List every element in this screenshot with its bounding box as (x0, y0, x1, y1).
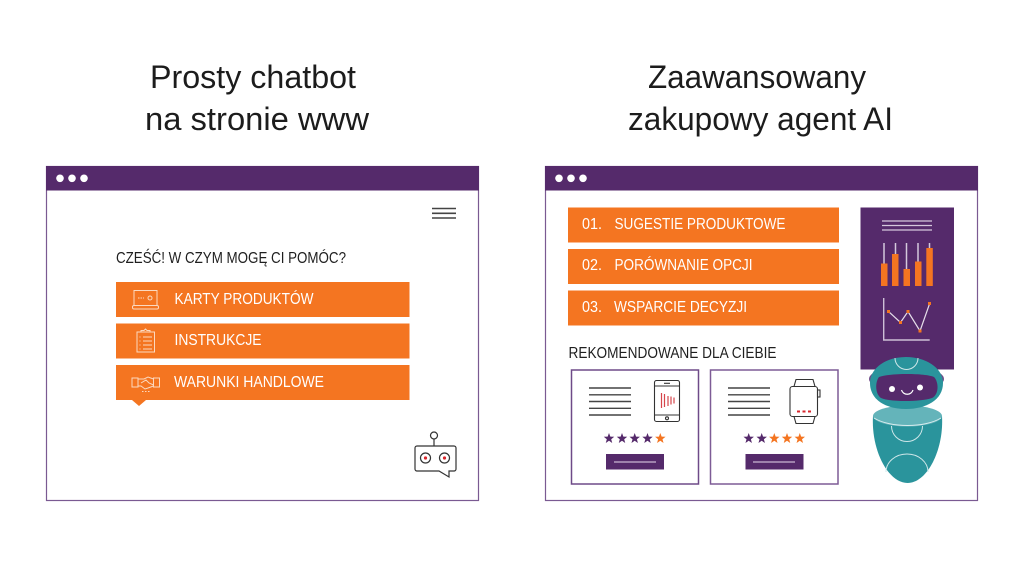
robot neck plate (873, 406, 942, 426)
window title bar (545, 166, 978, 190)
greeting text: CZEŚĆ! W CZYM MOGĘ CI POMÓC? (116, 249, 346, 267)
candlestick chart (881, 243, 933, 286)
product card: smartwatch (710, 370, 838, 484)
option 03: decision support: 03. (582, 299, 602, 316)
title: advanced AI agent (628, 59, 893, 137)
menu button: trade terms (116, 365, 410, 406)
title: simple chatbot: na stronie www (145, 101, 370, 137)
panel: simple chatbot browser window (46, 166, 479, 500)
text lines (589, 388, 631, 415)
title: simple chatbot: Prosty chatbot (150, 59, 356, 95)
menu button: instructions (116, 324, 410, 358)
menu button: product cards: KARTY PRODUKTÓW (174, 291, 314, 308)
icon: chatbot speech bubble (415, 432, 456, 477)
robot body (873, 416, 942, 483)
panel: analytics sidebar (860, 208, 954, 370)
product card: phone (572, 370, 698, 484)
robot visor and face (876, 374, 938, 401)
illustration: teal robot (869, 357, 944, 483)
option 01: product suggestions (568, 208, 839, 242)
option 03: decision support: WSPARCIE DECYZJI (614, 299, 747, 316)
text lines (728, 388, 770, 415)
body details (886, 426, 928, 472)
option 01: product suggestions: SUGESTIE PRODUKTOWE (614, 216, 786, 233)
window title bar (46, 166, 479, 190)
star rating: 2 purple 3 orange (743, 433, 805, 443)
icon: hamburger menu (432, 208, 456, 218)
robot ears (869, 366, 944, 392)
text lines (882, 221, 932, 230)
option 01: product suggestions: 01. (582, 216, 602, 233)
icon: laptop (132, 290, 158, 309)
option 02: comparing options (568, 249, 839, 284)
panel: AI agent browser window (545, 166, 978, 500)
menu button: instructions: INSTRUKCJE (174, 332, 262, 349)
icon: handshake (132, 377, 160, 392)
title: advanced AI agent: Zaawansowany (648, 59, 866, 95)
title: simple chatbot (145, 59, 370, 137)
option 02: comparing options: PORÓWNANIE OPCJI (614, 257, 752, 274)
option 02: comparing options: 02. (582, 257, 602, 274)
robot head (870, 357, 943, 409)
icon: smartwatch (790, 380, 820, 424)
button (606, 454, 664, 470)
icon: smartphone (654, 380, 680, 422)
line chart (884, 298, 931, 340)
heading: recommended for you: REKOMENDOWANE DLA CIEBIE (568, 345, 776, 362)
menu button: product cards (116, 282, 410, 317)
menu button: trade terms: WARUNKI HANDLOWE (174, 374, 324, 391)
star rating: 4 purple 1 orange (604, 433, 666, 443)
icon: clipboard (137, 329, 154, 352)
button (746, 454, 804, 470)
title: advanced AI agent: zakupowy agent AI (628, 101, 893, 137)
option 03: decision support (568, 290, 839, 326)
